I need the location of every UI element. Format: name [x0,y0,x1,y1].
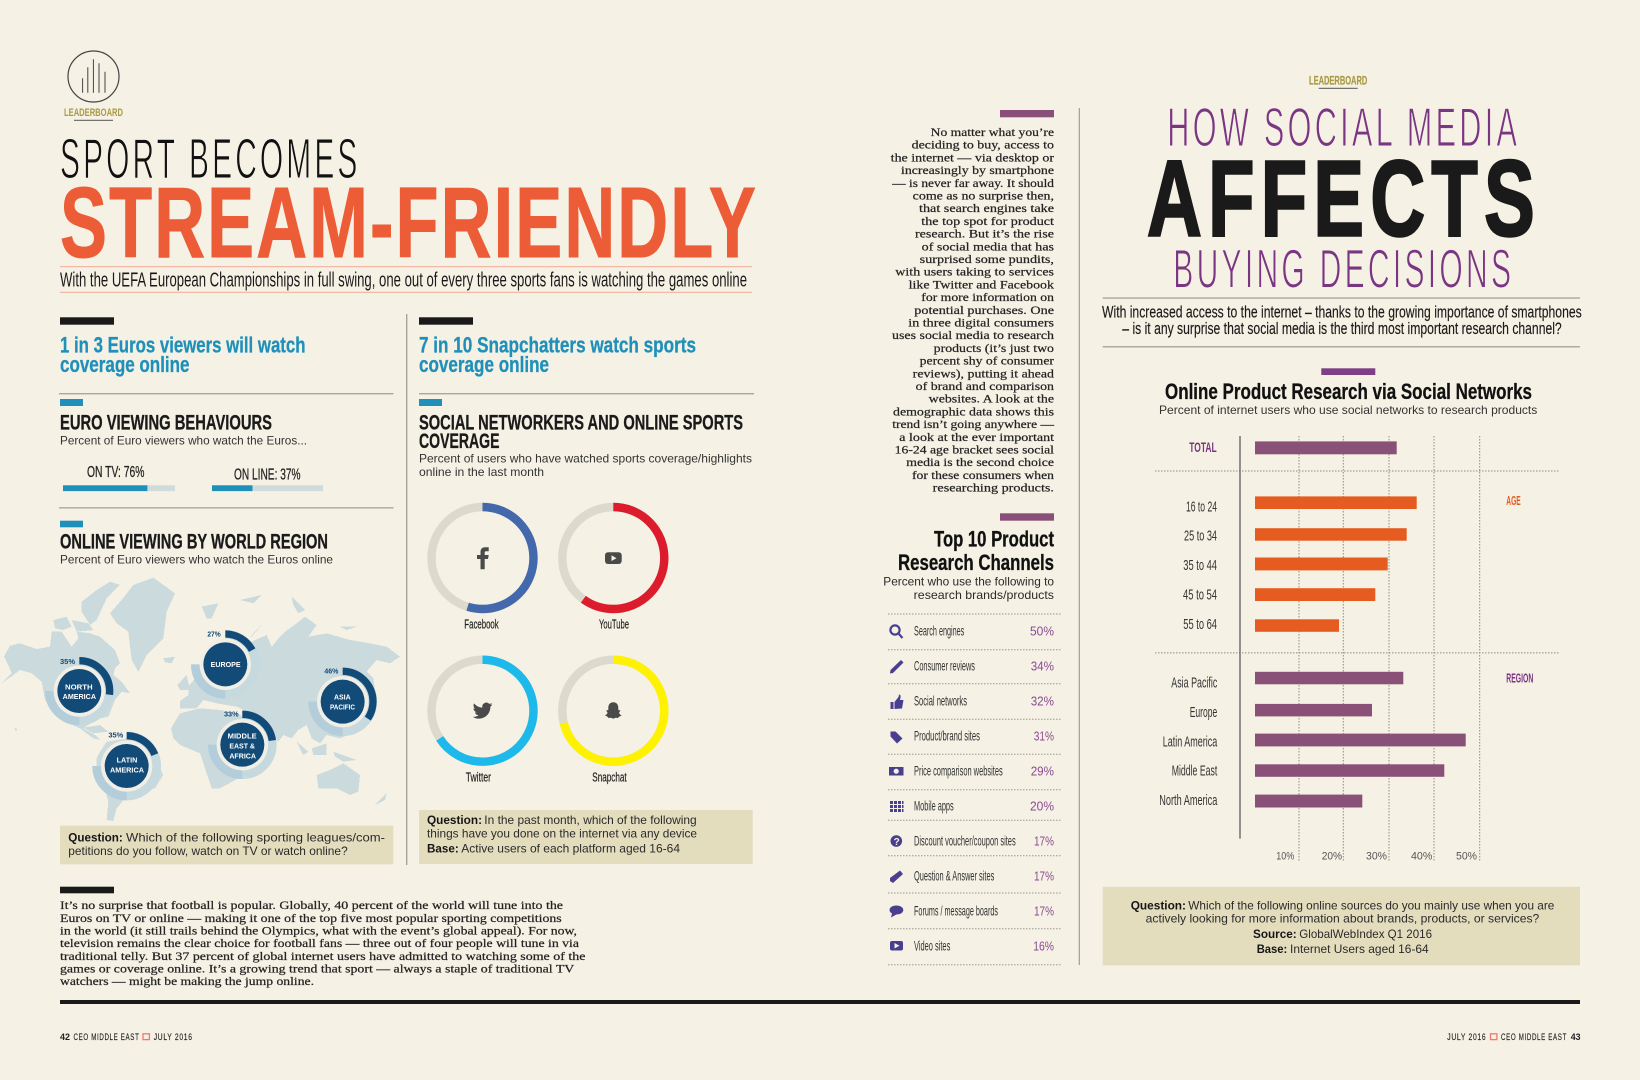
text block: research body copy: a look at the ever important [899,430,1055,444]
labels: age groups: 16 to 24 [1186,498,1217,515]
heading: social networkers: SOCIAL NETWORKERS AND ONLINE SPORTS [419,411,743,434]
bar chart: research via social networks [1155,436,1559,862]
labels: regions: North America [1159,792,1218,809]
text block: research body copy: increasingly by smartphone [901,163,1054,177]
ring: middle east and africa 33% [212,712,273,775]
row: video sites: 16% [1033,940,1054,954]
callout: question box centre: Active users of each platform aged 16-64 [461,841,680,855]
text block: research body copy: researching products. [933,481,1054,495]
text block: research body copy: surprised some pundits, [920,252,1054,266]
ring: middle east and africa 33%: 33% [224,712,239,719]
row: product/brand sites: Product/brand sites [914,728,980,744]
row: social networks [890,692,1054,709]
section tag: leaderboard right [1309,75,1367,89]
text block: research body copy: No matter what you’re [931,125,1054,139]
region label: REGION [1506,670,1533,686]
axis labels: 50% [1456,850,1477,862]
icon: facebook f [477,547,489,569]
ring: middle east and africa 33%: EAST & [229,744,255,751]
ring: middle east and africa 33%: MIDDLE [228,734,257,741]
bar: total: TOTAL [1189,439,1217,455]
labels: age groups: 55 to 64 [1183,616,1217,633]
text block: football body copy: traditional telly. But 37 percent of global internet users have admitted to watching some of the [60,949,585,963]
ring: north america 35% [49,659,110,721]
text block: research body copy: uses social media to research [892,328,1054,342]
icon: leaderboard logo [68,51,119,102]
caption [883,575,1054,602]
icon: speech bubble [890,906,903,918]
callout: question box centre: things have you done on the internet via any device [427,826,697,840]
footer right [1447,1032,1580,1043]
text block: research body copy: come as no surprise then, [913,188,1054,202]
text block: football body copy: It’s no surprise that football is popular. Globally, 40 percent of the world will tune into the [60,898,563,912]
marker bar above centre copy [1000,110,1054,117]
ring: latin america 35%: 35% [108,732,124,739]
icon: magnifier [890,625,902,638]
donut: youtube [562,507,664,631]
title: stream-friendly: STREAM-FRIENDLY [60,167,758,279]
labels: regions: Asia Pacific [1171,674,1218,691]
text block: research body copy: websites. A look at the [929,392,1054,406]
heading [898,527,1055,575]
labels: age groups: 25 to 34 [1184,528,1217,544]
footer left: 42 [60,1032,70,1043]
row: social networks: 32% [1031,694,1054,708]
text block: research body copy: trend isn’t going anywhere — [892,417,1055,431]
text block: football body copy: in the world (it still trails behind the Olympics, what with the event’s global appeal). For now, [60,924,577,938]
labels: age groups: 35 to 44 [1183,557,1217,574]
marker bar [1321,368,1375,375]
text block: research body copy: deciding to buy, access to [912,138,1054,152]
text block: research body copy: the top spot for product [921,214,1055,228]
marker bar above body text [60,887,114,893]
row: price comparison websites: 29% [1031,764,1054,778]
heading: Top 10 Product [934,527,1055,552]
subtitle with rules [1102,297,1582,348]
stat: on tv 76% [63,464,175,491]
labels: age groups [1183,498,1217,633]
labels: age groups: 45 to 54 [1183,586,1217,604]
row: video sites: Video sites [914,938,950,954]
icon: app grid [890,801,904,812]
title: sport becomes: SPORT BECOMES [60,127,360,191]
caption: research brands/products [914,588,1054,602]
icon: twitter bird [473,703,492,719]
marker bar [419,317,473,325]
axis labels: 30% [1366,850,1387,862]
row: consumer reviews: 34% [1031,660,1054,674]
row: mobile apps: Mobile apps [914,798,954,814]
text block: research body copy: demographic data shows this [893,404,1054,418]
text block: research body copy: for these consumers when [912,468,1054,482]
callout: question box right: GlobalWebIndex Q1 2016 [1299,927,1432,941]
text block: research body copy: with users taking to services [895,265,1054,279]
section tag: leaderboard left [64,107,123,121]
icon: ticket [890,870,903,883]
row: discount voucher/coupon sites: 17% [1034,834,1054,848]
labels: regions [1159,674,1218,809]
footer rule [60,1000,1580,1004]
icon: thumbs up [890,694,904,709]
divider [1079,108,1080,965]
caption: Percent of users who have watched sports coverage/highlights [419,452,752,466]
chart heading: Online Product Research via Social Networks [1165,379,1532,404]
marker bar [60,317,114,325]
donut: twitter: Twitter [466,770,491,785]
text block: research body copy: reviews), putting it ahead [913,366,1054,380]
text block: football body copy: television remains the clear choice for football fans — three out of four people will tune in via [60,936,580,950]
row: product/brand sites: 31% [1034,730,1054,744]
ring: latin america 35% [96,732,157,796]
caption: online in the last month [419,465,544,479]
stat: on line 37%: ON LINE: 37% [234,467,301,484]
row: price comparison websites: Price comparison websites [914,762,1003,778]
ring: north america 35%: 35% [60,659,76,666]
row: search engines: 50% [1030,624,1054,638]
row: search engines: Search engines [914,622,964,638]
text block: research body copy [891,125,1055,495]
headline: 7 in 10: coverage online [419,352,549,377]
icon: pencil [890,660,904,674]
text block: research body copy: for more information on [921,290,1054,304]
icon: youtube play [605,552,622,564]
subtitle with rules: With the UEFA European Championships in full swing, one out of every three sports fans is watching the games online [60,270,747,292]
text block: football body copy: watchers — might be making the jump online. [60,974,314,988]
donut: facebook: Facebook [464,616,499,631]
row: video sites [890,938,1054,954]
callout: question box centre [419,810,753,864]
text block: football body copy: games or coverage online. It’s a growing trend that sport — always a staple of traditional TV [60,962,575,976]
divider [406,314,407,865]
callout: question box right [1103,887,1580,965]
callout: question box right: Source: [1253,927,1297,941]
row: search engines [890,622,1054,638]
row: mobile apps: 20% [1030,800,1054,814]
text block: research body copy: the internet — via desktop or [891,150,1054,164]
footer left: CEO MIDDLE EAST [74,1032,140,1043]
ring: europe 27%: EUROPE [211,662,241,669]
text block: football body copy: Euros on TV or online — making it one of the top five most popular sporting competitions [60,911,562,925]
headline: 1 in 3: coverage online [60,352,190,377]
ring: middle east and africa 33%: AFRICA [229,754,256,761]
ring: asia pacific 46%: 46% [324,669,339,676]
row: question and answer sites: 17% [1034,870,1054,884]
callout: question box left: Question: [68,831,123,845]
stat: on tv 76%: ON TV: 76% [87,464,145,481]
row: social networks: Social networks [914,692,967,708]
labels: regions: Latin America [1163,733,1218,750]
axis labels: 10% [1276,850,1294,862]
ring: latin america 35%: AMERICA [110,767,144,774]
heading: social networkers [419,411,743,453]
axis labels: 20% [1322,850,1342,862]
text block: research body copy: of social media that has [922,239,1054,253]
callout: question box right: Base: [1257,942,1287,956]
row: forums / message boards: Forums / message boards [914,902,998,918]
panel: left column euro viewing [2,317,400,864]
row: mobile apps [890,798,1054,814]
row: discount voucher/coupon sites [890,832,1054,848]
ring: north america 35%: NORTH [65,684,93,691]
row: discount voucher/coupon sites: Discount voucher/coupon sites [914,832,1016,848]
chart caption: Percent of internet users who use social networks to research products [1159,403,1537,417]
footer left: JULY 2016 [154,1032,193,1043]
footer right: 43 [1571,1032,1580,1043]
text block: research body copy: that search engines take [919,201,1054,215]
ring: asia pacific 46% [312,669,373,732]
icon: snapchat ghost [605,702,622,719]
row: forums / message boards: 17% [1034,904,1054,918]
headline: 1 in 3: 1 in 3 Euros viewers will watch [60,333,306,358]
section tag: leaderboard left: LEADERBOARD [64,107,123,119]
ring: asia pacific 46%: PACIFIC [330,704,355,711]
section tag: leaderboard right: LEADERBOARD [1309,75,1367,87]
heading: euro viewing behaviours: EURO VIEWING BEHAVIOURS [60,411,272,434]
map land [2,578,400,821]
headline: 1 in 3 [60,333,306,377]
heading: Research Channels [898,550,1054,575]
panel: top 10 product research channels [883,513,1062,965]
labels: regions: Middle East [1172,762,1218,780]
bar: total [1189,439,1397,455]
text block: research body copy: products (it’s just two [934,341,1054,355]
heading: online viewing by world region: ONLINE VIEWING BY WORLD REGION [60,530,328,553]
ring: asia pacific 46%: ASIA [334,694,351,701]
footer right: JULY 2016 [1447,1032,1486,1043]
text block: research body copy: research. But it’s the rise [915,227,1054,241]
donut: snapchat [562,660,664,785]
text block: research body copy: potential purchases. One [914,303,1054,317]
donut: facebook [432,507,534,631]
labels: regions: Europe [1190,704,1217,721]
callout: question box centre: Base: [427,841,459,855]
axis labels [1276,850,1477,862]
bars: regions [1255,670,1533,808]
text block: research body copy: of brand and comparison [916,379,1054,393]
icon: video play [890,941,903,950]
callout: question box centre: In the past month, which of the following [484,813,697,827]
text block: research body copy: like Twitter and Facebook [909,277,1054,291]
footer right: CEO MIDDLE EAST [1501,1032,1567,1043]
heading: social networkers: COVERAGE [419,430,500,453]
ring: europe 27%: 27% [207,632,221,639]
donut: twitter [432,660,534,785]
donut: youtube: YouTube [599,616,629,631]
icon: help circle: ? [894,837,900,848]
ring: latin america 35%: LATIN [117,757,137,764]
text block: research body copy: media is the second choice [906,455,1054,469]
caption: Percent of Euro viewers who watch the Euros online [60,552,333,566]
callout: question box left: Which of the following sporting leagues/com- [126,831,385,845]
caption: Percent of Euro viewers who watch the Euros... [60,433,307,447]
text block: research body copy: in three digital consumers [908,316,1054,330]
ring: north america 35%: AMERICA [63,694,96,701]
text block: research body copy: — is never far away. It should [891,176,1054,190]
callout: question box left [60,826,393,864]
bars: age groups [1255,493,1521,632]
axis labels: 40% [1411,850,1432,862]
text block: football body copy [60,898,585,988]
row: question and answer sites: Question & Answer sites [914,868,994,884]
icon: help circle [890,835,902,848]
row: consumer reviews: Consumer reviews [914,658,975,674]
stat: on line 37% [212,467,323,491]
icon: tag [890,732,902,744]
panel: snapchatters column [419,317,754,864]
headline: 7 in 10 [419,333,696,377]
callout: question box right: Which of the following online sources do you mainly use when you are [1188,898,1555,912]
headline: 7 in 10: 7 in 10 Snapchatters watch sports [419,333,696,358]
callout: question box right: Question: [1131,898,1186,912]
caption [419,452,752,479]
callout: question box right: actively looking for more information about brands, products, or services? [1146,912,1540,926]
callout: question box left: petitions do you follow, watch on TV or watch online? [68,844,348,858]
world map region rings [49,632,373,796]
callout: question box right: Internet Users aged 16-64 [1290,942,1429,956]
donut: snapchat: Snapchat [592,770,627,785]
callout: question box centre: Question: [427,813,482,827]
ring: europe 27% [195,632,256,695]
text block: research body copy: 16-24 age bracket sees social [895,442,1055,456]
text block: research body copy: percent shy of consumer [920,354,1054,368]
age label: AGE [1506,493,1521,508]
icon: banknote [889,767,904,776]
caption: Percent who use the following to [883,575,1054,589]
